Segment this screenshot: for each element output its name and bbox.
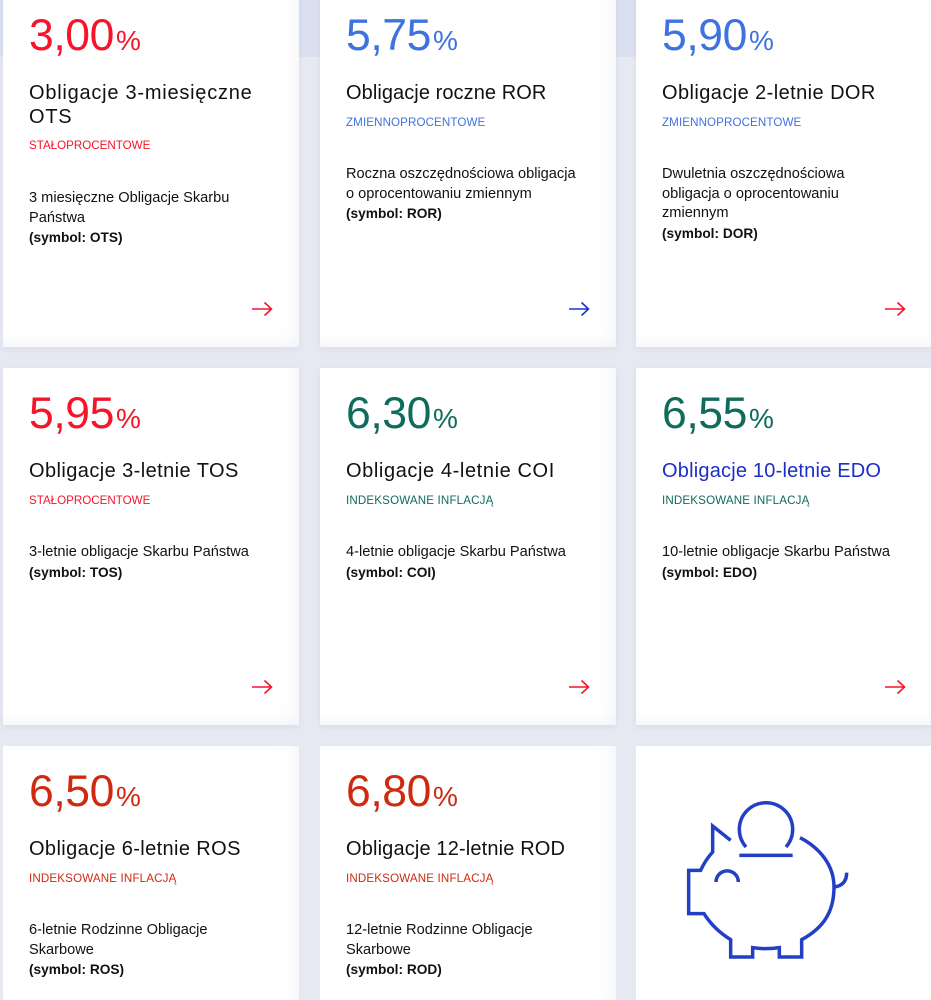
description: COI: (symbol: COI) [346,565,436,580]
description: ROS [29,922,207,977]
icon: arrow [569,680,590,694]
tag: inflation indexed: INDEKSOWANE INFLACJĄ [29,872,177,885]
heading: OTS: Obligacje 3-miesięczne [29,82,252,104]
description: EDO: 10-letnie obligacje Skarbu Państwa [662,544,890,560]
panel: OTS bond card [3,0,299,347]
icon: arrow [885,680,906,694]
description: ROD [346,922,533,977]
description: DOR: Dwuletnia oszczędnościowa [662,166,845,182]
description: ROR: o oprocentowaniu zmiennym [346,186,532,202]
tag: inflation indexed: INDEKSOWANE INFLACJĄ [346,494,494,507]
tag: fixed rate: STAŁOPROCENTOWE [29,494,150,507]
description: ROS: Skarbowe [29,942,94,958]
tag: fixed rate: STAŁOPROCENTOWE [29,139,150,152]
description: COI: 4-letnie obligacje Skarbu Państwa [346,544,566,560]
description: OTS: 3 miesięczne Obligacje Skarbu [29,190,229,206]
panel: COI bond card [320,368,616,725]
rate: 5,75%: 5,75% [346,11,458,60]
heading: OTS: OTS [29,106,72,128]
description: COI [346,544,566,580]
heading: COI: Obligacje 4-letnie COI [346,460,555,482]
description: ROR: (symbol: ROR) [346,206,442,221]
description: ROR [346,166,576,221]
panel: TOS bond card [3,368,299,725]
description: DOR: (symbol: DOR) [662,226,758,241]
rate: 5,90%: 5,90% [662,11,774,60]
heading: DOR: Obligacje 2-letnie DOR [662,82,876,104]
rate: 6,50%: 6,50% [29,767,141,816]
description: TOS: 3-letnie obligacje Skarbu Państwa [29,544,249,560]
description: OTS: Państwa [29,210,85,226]
heading: ROR: Obligacje roczne ROR [346,82,546,104]
tag: variable rate: ZMIENNOPROCENTOWE [662,116,801,129]
description: TOS [29,544,249,580]
tag: variable rate: ZMIENNOPROCENTOWE [346,116,485,129]
rate: 6,80%: 6,80% [346,767,458,816]
description: DOR [662,166,845,241]
rate: 5,95%: 5,95% [29,389,141,438]
icon: piggy bank with coin [686,801,848,959]
description: DOR: zmiennym [662,205,728,221]
heading: OTS [29,82,252,128]
rate: 6,30%: 6,30% [346,389,458,438]
icon: arrow [569,302,590,316]
heading: TOS: Obligacje 3-letnie TOS [29,460,239,482]
icon: arrow [885,302,906,316]
panel: EDO bond card [636,368,931,725]
rate: 6,55%: 6,55% [662,389,774,438]
description: EDO [662,544,890,580]
heading: EDO: Obligacje 10-letnie EDO [662,460,881,482]
icon: arrow [252,680,273,694]
description: OTS [29,190,229,245]
icon: arrow [252,302,273,316]
panel: DOR bond card [636,0,931,347]
description: TOS: (symbol: TOS) [29,565,122,580]
description: ROR: Roczna oszczędnościowa obligacja [346,166,576,182]
panel: ROS bond card [3,746,299,1000]
description: ROS: (symbol: ROS) [29,962,124,977]
description: ROD: (symbol: ROD) [346,962,442,977]
description: EDO: (symbol: EDO) [662,565,757,580]
heading: ROD: Obligacje 12-letnie ROD [346,838,565,860]
description: ROD: 12-letnie Rodzinne Obligacje [346,922,533,938]
tag: inflation indexed: INDEKSOWANE INFLACJĄ [662,494,810,507]
tag: inflation indexed: INDEKSOWANE INFLACJĄ [346,872,494,885]
panel: piggy bank card [636,746,931,1000]
description: ROD: Skarbowe [346,942,411,958]
rate: 3,00%: 3,00% [29,11,141,60]
description: OTS: (symbol: OTS) [29,230,123,245]
panel: ROD bond card [320,746,616,1000]
description: DOR: obligacja o oprocentowaniu [662,186,839,202]
panel: ROR bond card [320,0,616,347]
description: ROS: 6-letnie Rodzinne Obligacje [29,922,207,938]
heading: ROS: Obligacje 6-letnie ROS [29,838,241,860]
